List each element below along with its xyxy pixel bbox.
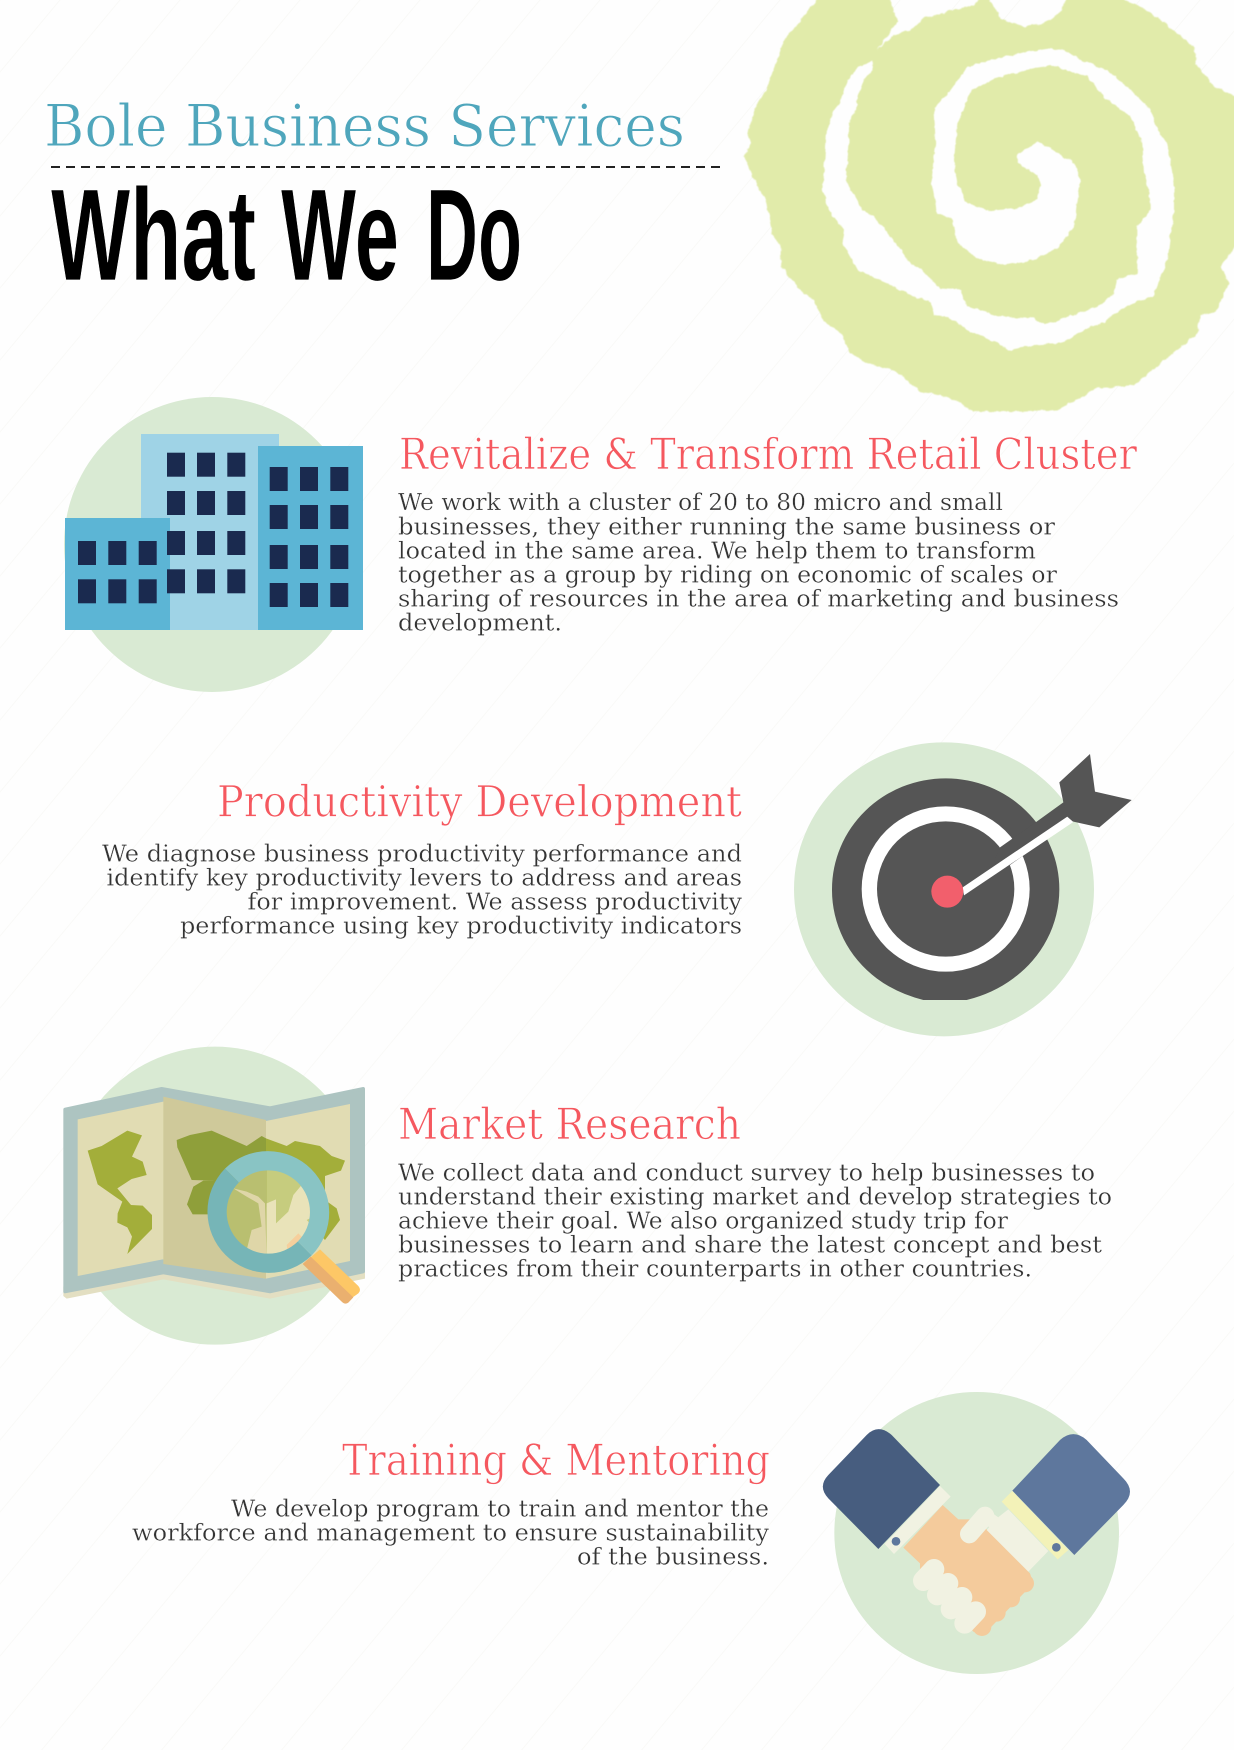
body text: understand their existing market and develop strategies to xyxy=(398,1184,1112,1210)
body text: We develop program to train and mentor the xyxy=(231,1497,769,1523)
body text: of the business. xyxy=(577,1544,769,1570)
body text xyxy=(132,1497,769,1570)
body text: We collect data and conduct survey to help businesses to xyxy=(398,1161,1095,1187)
body text: development. xyxy=(398,611,562,637)
body text xyxy=(398,490,1119,637)
icon: office buildings xyxy=(64,397,363,692)
company name: Bole Business Services xyxy=(44,92,685,160)
body text xyxy=(398,1161,1112,1283)
body text: We work with a cluster of 20 to 80 micro and small xyxy=(398,490,1003,516)
body text: identify key productivity levers to address and areas xyxy=(106,866,742,892)
body text: performance using key productivity indicators xyxy=(180,914,742,940)
icon: target with dart xyxy=(794,742,1132,1036)
body text: businesses to learn and share the latest concept and best xyxy=(398,1233,1103,1259)
title block xyxy=(44,92,720,308)
body text: businesses, they either running the same business or xyxy=(398,514,1055,540)
section: Training and Mentoring xyxy=(132,1436,770,1570)
body text: practices from their counterparts in other countries. xyxy=(398,1257,1032,1283)
section: Revitalize and Transform Retail Cluster xyxy=(398,430,1137,637)
icon: world map with magnifying glass xyxy=(63,1047,365,1345)
heading: Training & Mentoring xyxy=(342,1436,770,1486)
body text: together as a group by riding on economic of scales or xyxy=(398,563,1057,589)
body text: achieve their goal. We also organized study trip for xyxy=(398,1208,1008,1234)
icon: handshake xyxy=(823,1392,1130,1674)
section: Productivity Development xyxy=(102,778,742,940)
main heading: What xyxy=(51,161,256,308)
body text: We diagnose business productivity performance and xyxy=(102,842,742,868)
body text: located in the same area. We help them to transform xyxy=(398,538,1036,564)
body text: sharing of resources in the area of marketing and business xyxy=(398,587,1119,613)
heading: Revitalize & Transform Retail Cluster xyxy=(399,430,1137,480)
main heading: Do xyxy=(426,161,522,308)
heading: Market Research xyxy=(398,1100,741,1150)
heading: Productivity Development xyxy=(217,778,742,828)
body text: for improvement. We assess productivity xyxy=(248,890,742,916)
body text: workforce and management to ensure sustainability xyxy=(132,1521,769,1547)
icon: green spiral xyxy=(745,0,1234,412)
section: Market Research xyxy=(398,1100,1112,1283)
main heading: We xyxy=(281,161,399,308)
body text xyxy=(102,842,742,940)
